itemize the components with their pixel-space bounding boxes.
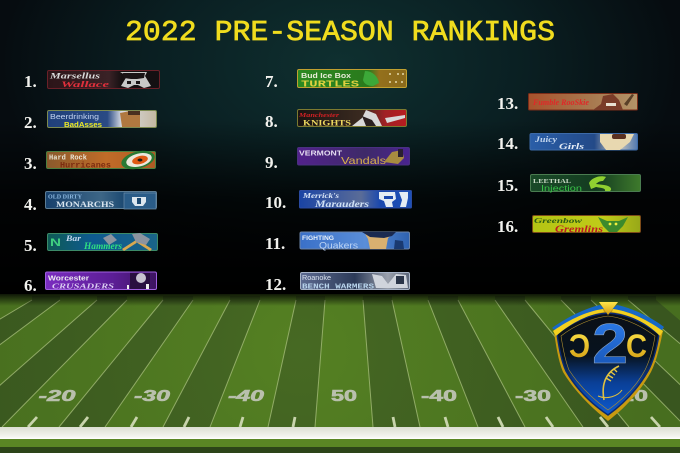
shield gold top arc [553,309,663,336]
yard numbers: 50 [331,388,357,405]
rank 16: 16. [497,217,518,236]
banner: Roanoke Bench Warmers: BENCH WARMERS [302,284,375,292]
banner: Beerdrinking BadAsses: Beerdrinking [50,112,99,121]
rank 6 [24,272,156,295]
rank 10 [265,190,412,212]
banner: Bud Ice Box Turtles: Bud Ice Box [301,71,352,80]
shield top triangle [599,302,618,315]
banner: Old Dirty Monarchs: OLD DIRTY [48,194,83,200]
banner: Beerdrinking BadAsses: BadAsses [64,120,102,129]
title: 2022 PRE-SEASON RANKINGS [125,16,555,49]
rank 5: 5. [24,236,37,255]
logo: D2C shield: 2 [592,312,628,376]
banner: Greenbow Gremlins: Greenbow [534,216,584,225]
rank 3: 3. [24,154,37,173]
banner: Fighting Quakers: Quakers [319,240,358,252]
banner: Worcester Crusaders: Worcester [48,276,89,282]
rank 3 [24,148,157,173]
background fade to black [0,120,680,296]
banner: Leethal Injection: LEETHAL [533,178,572,185]
shield body [554,308,663,421]
rank 2 [24,110,156,132]
rank 6: 6. [24,276,37,295]
banner: Juicy Girls [530,134,638,151]
banner: Worcester Crusaders [46,272,156,290]
rank 14 [497,134,638,153]
banner: Fighting Quakers [300,232,410,252]
banner: Juicy Girls: Juicy [534,135,558,144]
rank 11: 11. [265,234,285,253]
banner: Vermont Vandals: Vandals [341,155,386,167]
shield blue top arc [552,305,664,331]
rank 4 [24,192,156,214]
rank 16 [497,216,640,236]
rank 10: 10. [265,193,286,212]
banner: Bud Ice Box Turtles [298,70,406,90]
yard numbers: -30 [134,388,171,405]
rank 5 [24,233,158,255]
banner: Bud Ice Box Turtles: TURTLES [301,80,360,90]
rank 8 [265,110,406,131]
banner: Juicy Girls: Girls [559,141,585,151]
rank 9: 9. [265,153,278,172]
rank 8: 8. [265,112,278,131]
hash marks [28,417,660,427]
banner: Leethal Injection [530,174,640,193]
banner: Old Dirty Monarchs: MONARCHS [56,199,114,209]
banner: Greenbow Gremlins: Gremlins [555,224,604,234]
banner: Merrick's Marauders [300,190,412,209]
rank 4: 4. [24,195,37,214]
banner: Merrick's Marauders: Merrick's [302,191,339,200]
banner: Marsellus Wallace [48,70,160,89]
banner: Merrick's Marauders: Marauders [314,199,370,209]
banner: Bar Hammers: Hammers [83,242,122,252]
inner outline [561,316,655,410]
banner: Bar Hammers: Bar [65,233,82,243]
banner: Hard Rock Hurricanes: Hurricanes [60,162,111,170]
banner: Bar Hammers [48,233,158,252]
logo: D2C shield [552,302,664,421]
banner: Vermont Vandals: VERMONT [299,150,343,158]
yard numbers [38,388,648,405]
banner: Hard Rock Hurricanes [46,148,157,172]
rank 1: 1. [24,72,37,91]
logo: D2C shield: C [626,328,647,364]
banner: Old Dirty Monarchs [46,192,156,209]
rank 2: 2. [24,113,37,132]
rank 9 [265,148,410,172]
rank 7: 7. [265,72,278,91]
banner: Worcester Crusaders: CRUSADERS [52,282,114,290]
rank 13: 13. [497,94,518,113]
rank 15: 15. [497,176,518,195]
rank 14: 14. [497,134,518,153]
banner: Fighting Quakers: FIGHTING [302,235,334,242]
banner: Hard Rock Hurricanes: Hard Rock [49,154,87,162]
banner: Marsellus Wallace: Marsellus [48,72,100,80]
banner: Greenbow Gremlins [532,216,640,234]
yard numbers: -30 [515,388,551,405]
rank 15 [497,174,640,195]
banner: Beerdrinking BadAsses [48,110,156,129]
banner: Fumble RooSkies [528,94,638,110]
banner: Vermont Vandals [298,148,410,167]
background: dark stadium sky [0,0,680,296]
banner: Roanoke Bench Warmers [300,272,410,292]
yard numbers: -40 [228,388,265,405]
banner: Leethal Injection: Injection [541,183,582,193]
yard lines [0,300,680,427]
banner: Bar Hammers: N [50,237,61,249]
rank 1 [24,70,160,91]
yard numbers: -40 [421,388,457,405]
banner: Roanoke Bench Warmers: Roanoke [302,275,331,282]
football field [0,294,680,453]
sideline [0,427,680,439]
banner: Manchester Knights: KNIGHTS [303,118,351,128]
rank 12 [265,272,410,294]
yard numbers: -20 [38,388,76,405]
banner: Fumble RooSkies: Fumble RooSkie [532,97,589,107]
banner: Manchester Knights: Manchester [298,112,340,119]
banner: Marsellus Wallace: Wallace [61,79,109,89]
rank 13 [497,94,638,113]
rank 12: 12. [265,275,286,294]
banner: Manchester Knights [298,110,406,128]
yard numbers: -20 [612,388,648,405]
rank 11 [265,232,410,253]
letters D2C: C [569,328,590,364]
rank 7 [265,70,406,91]
field stripes [0,296,680,427]
field top shadow [0,294,680,306]
football [598,366,622,400]
